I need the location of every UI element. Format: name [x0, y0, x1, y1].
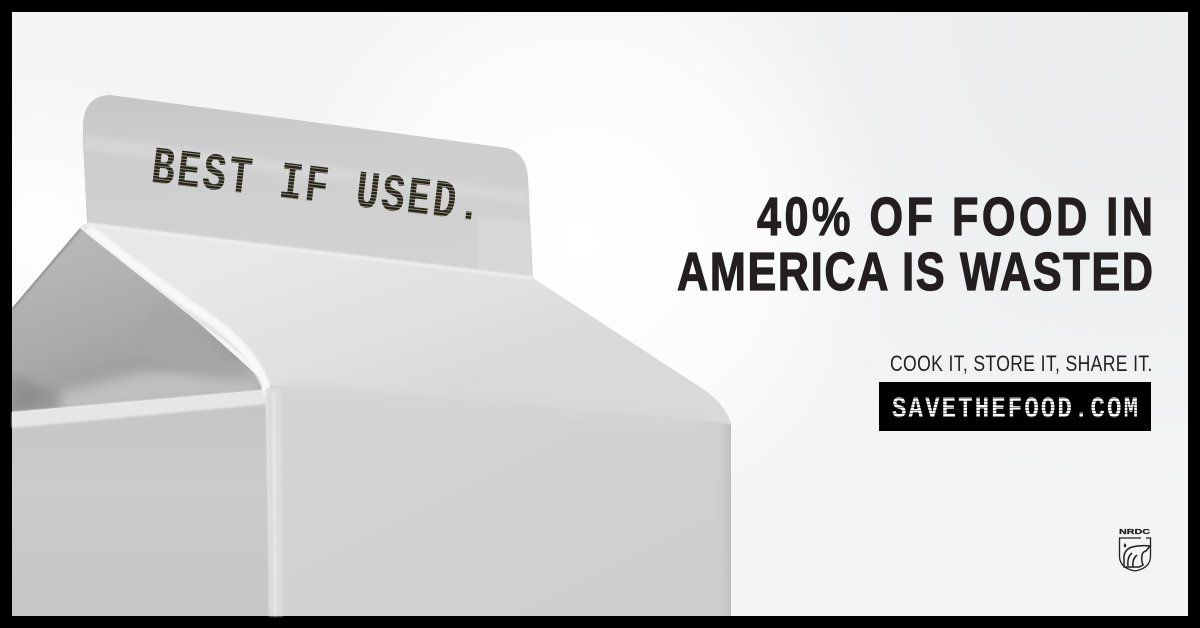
headline: AMERICA IS WASTED [677, 243, 1153, 302]
gusset shadow [12, 228, 262, 412]
left carton face [12, 403, 270, 616]
headline [677, 188, 1153, 302]
light strip on left shoulder [12, 390, 268, 428]
carton flap [83, 95, 533, 278]
right carton face [270, 385, 731, 616]
website badge [879, 382, 1151, 431]
roof panel [80, 224, 731, 445]
NRDC logo: NRDC [1119, 527, 1151, 536]
milk carton photo [12, 95, 731, 616]
tagline: COOK IT, STORE IT, SHARE IT. [890, 352, 1152, 377]
headline: 40% OF FOOD IN [757, 188, 1153, 247]
printed date stamp: BEST IF USED. [148, 138, 485, 237]
flap fold shading [84, 136, 532, 277]
crease highlight [88, 228, 268, 392]
website badge: SAVETHEFOOD.COM [892, 394, 1138, 427]
flap bottom crease [87, 224, 533, 278]
right edge shade [716, 420, 731, 616]
vertical corner crease [266, 388, 283, 616]
roof to face transition [280, 384, 700, 428]
NRDC logo [1119, 527, 1151, 571]
